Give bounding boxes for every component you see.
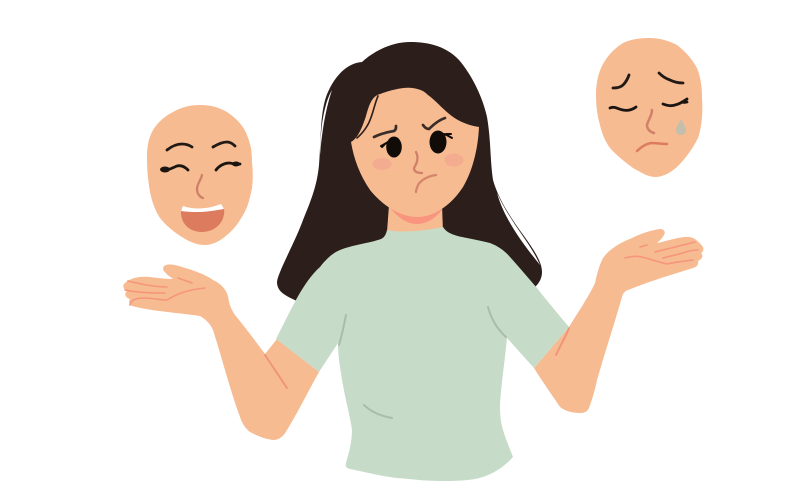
eyebrows xyxy=(167,142,235,150)
right eyebrow xyxy=(423,118,445,129)
arm crease xyxy=(556,328,569,355)
laughing eyes xyxy=(162,163,240,170)
closed eyes xyxy=(610,99,687,110)
left eye xyxy=(381,136,402,158)
shirt creases xyxy=(339,307,506,418)
right cheek xyxy=(444,154,464,166)
left cheek xyxy=(372,158,392,170)
eyebrows xyxy=(613,73,683,88)
neck xyxy=(387,200,443,232)
nose xyxy=(414,152,422,173)
left arm and hand xyxy=(123,264,319,440)
right eye xyxy=(430,130,452,154)
left eyebrow xyxy=(374,126,396,137)
sad mask xyxy=(596,38,702,177)
hair xyxy=(277,42,542,320)
frowning mouth xyxy=(416,175,436,192)
arm crease xyxy=(265,355,287,388)
happy mask xyxy=(147,105,253,245)
nose xyxy=(197,175,203,198)
shirt xyxy=(276,227,569,481)
palm lines xyxy=(625,242,698,264)
sad mouth xyxy=(637,143,667,151)
face xyxy=(351,88,479,217)
palm lines xyxy=(125,278,205,305)
right arm and hand xyxy=(534,229,703,413)
tear drop xyxy=(676,119,686,135)
nose xyxy=(647,110,654,133)
laughing mouth xyxy=(181,204,224,232)
